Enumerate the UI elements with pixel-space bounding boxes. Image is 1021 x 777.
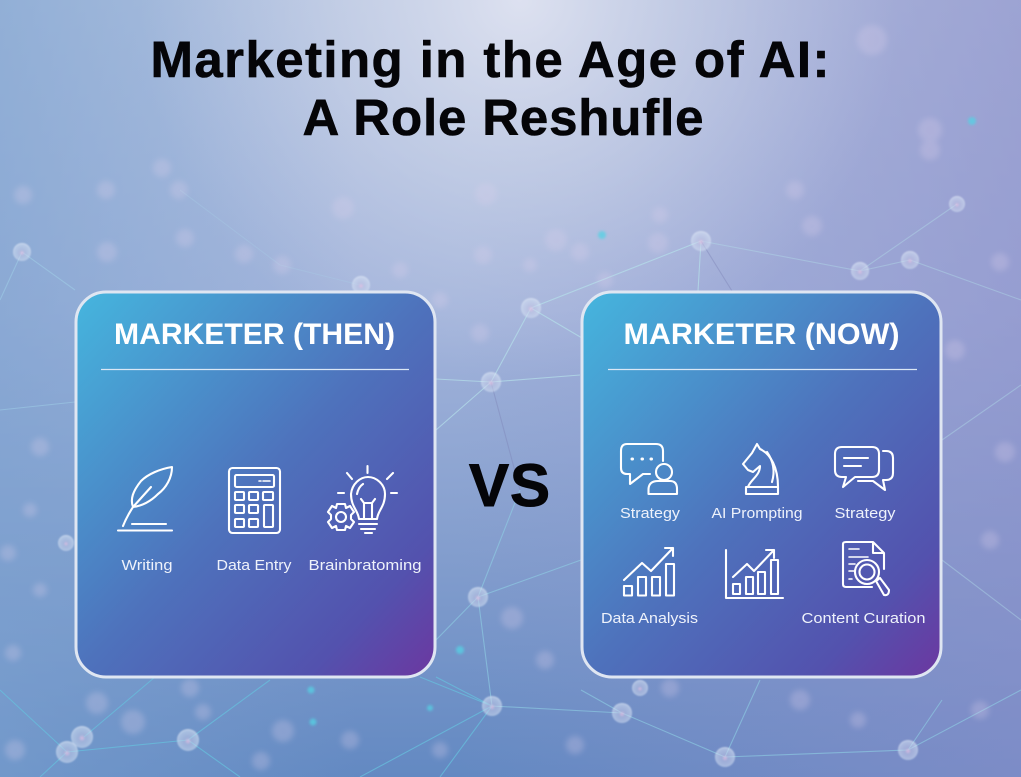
icon: light bulb with gear	[328, 466, 397, 533]
icon: bar chart with axes	[726, 550, 783, 598]
label: strategy: Strategy	[620, 505, 681, 522]
label: ai prompting: AI Prompting	[712, 505, 802, 522]
label: writing: Writing	[122, 557, 172, 574]
panel: marketer then	[76, 292, 435, 677]
heading: marketer now: MARKETER (NOW)	[624, 318, 900, 351]
icon: chat with person	[621, 444, 677, 494]
title: A Role Reshufle	[302, 89, 704, 146]
label: data entry: Data Entry	[216, 557, 292, 574]
panel background then	[76, 292, 435, 677]
icon: calculator	[229, 468, 280, 533]
title: Marketing in the Age of AI:	[150, 31, 830, 88]
label: strategy 2: Strategy	[834, 505, 896, 522]
icon: document with magnifier	[843, 542, 889, 595]
title	[150, 31, 830, 146]
icon: feather	[118, 467, 172, 530]
vs label: VS	[469, 452, 550, 519]
heading: marketer then: MARKETER (THEN)	[114, 318, 395, 351]
label: brainstorming: Brainbratoming	[308, 557, 422, 574]
icon: chess knight	[743, 444, 778, 494]
icon: growth bars	[624, 548, 674, 596]
label: content curation: Content Curation	[802, 610, 926, 627]
panel: marketer now	[582, 292, 941, 677]
label: data analysis: Data Analysis	[601, 610, 698, 627]
panel background now	[582, 292, 941, 677]
icon: chat bubbles	[835, 447, 893, 490]
